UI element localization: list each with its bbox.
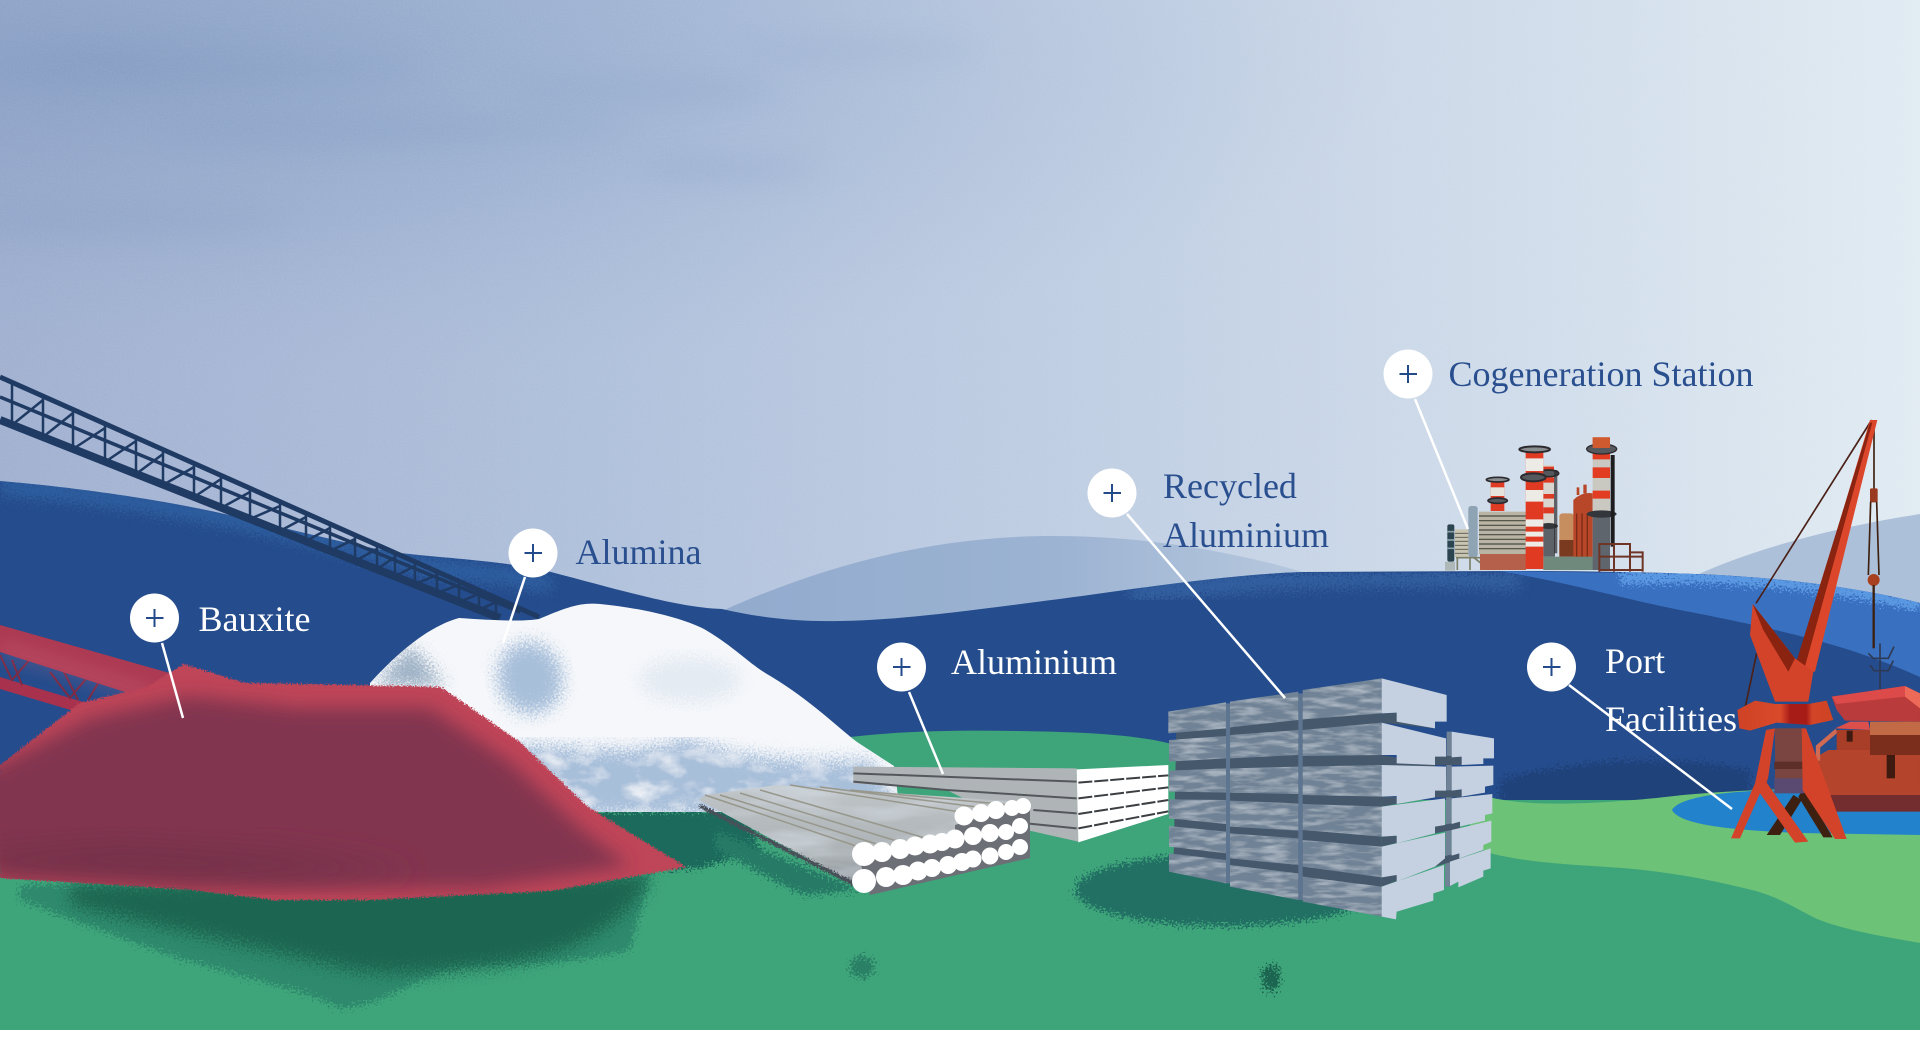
tall red chimney [1519, 446, 1550, 569]
crane and ship [1731, 420, 1920, 843]
sky background [0, 0, 1920, 660]
jib boom [1795, 420, 1877, 672]
rear legs [1767, 788, 1833, 837]
water pool [1672, 790, 1920, 835]
conveyor, red [0, 625, 180, 714]
callout: Alumina [503, 528, 702, 643]
stay cable [1745, 420, 1872, 708]
bauxite pile [0, 664, 686, 900]
callout: Recycled Aluminium: Recycled [1163, 466, 1297, 506]
rear chimney [1539, 465, 1559, 557]
lime green foreground, right [1470, 789, 1920, 943]
ground specks [850, 956, 1280, 991]
callout: Bauxite: Bauxite [198, 599, 310, 639]
small chimney [1486, 477, 1509, 511]
dark green ground [0, 731, 1920, 1030]
callout: Port Facilities: Port [1605, 641, 1665, 681]
ground shadow under bauxite, core [70, 875, 650, 974]
column [1774, 728, 1805, 793]
callout: Recycled Aluminium [1088, 466, 1329, 698]
turntable ring [1737, 701, 1833, 731]
ground shadow under bauxite, soft outer [20, 875, 650, 1008]
left service tower [1445, 506, 1487, 571]
ground shadow under ingots [1075, 854, 1375, 926]
callout: Recycled Aluminium: Aluminium [1163, 515, 1329, 555]
conveyor truss, dark blue [0, 377, 539, 618]
alumina pile [370, 604, 905, 815]
ground shadow under alumina [570, 811, 760, 870]
ship [1808, 643, 1920, 812]
front legs [1731, 728, 1847, 843]
callout: Port Facilities: Facilities [1605, 699, 1737, 739]
cogeneration station [1445, 437, 1643, 572]
green base [1543, 557, 1593, 570]
background mountain, centre [722, 536, 1330, 640]
callout: Cogeneration Station [1384, 350, 1753, 529]
scaffold frame [1599, 544, 1643, 572]
storage tank and vessel [1559, 485, 1593, 564]
aluminium round rods [699, 785, 1031, 895]
white strip at page bottom [0, 1030, 1920, 1040]
aluminium flat bars stack [853, 765, 1168, 842]
background mountain, right [1690, 514, 1920, 640]
callout: Port Facilities [1527, 641, 1737, 809]
main building [1479, 512, 1526, 570]
ground shadow under rods [715, 830, 860, 895]
callout: Cogeneration Station: Cogeneration Station [1448, 354, 1753, 394]
tallest chimney [1587, 437, 1617, 570]
blue hill [0, 481, 1920, 830]
callout: Aluminium: Aluminium [951, 642, 1117, 682]
ship mast [1868, 643, 1894, 690]
recycled aluminium ingot stack [1168, 678, 1494, 919]
callout: Bauxite [130, 594, 310, 718]
callout: Alumina: Alumina [576, 532, 702, 572]
counter arm [1750, 604, 1813, 702]
pulley and hook [1868, 428, 1880, 648]
callout: Aluminium [877, 642, 1117, 774]
